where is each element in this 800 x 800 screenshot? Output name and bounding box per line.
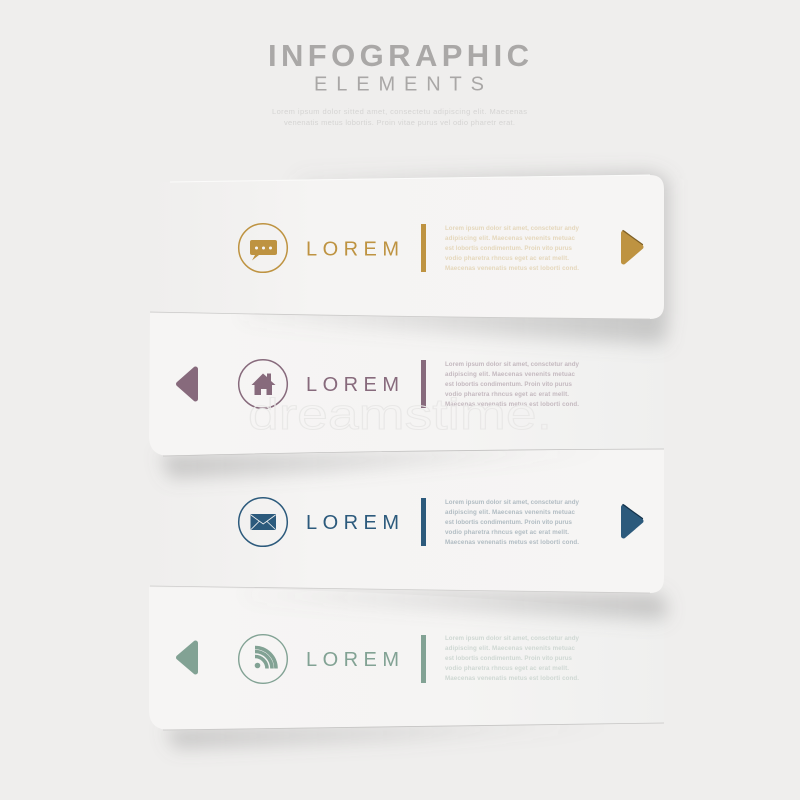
- description: est lobortis condimentum. Proin vito purus: [445, 245, 573, 252]
- label: LOREM: [306, 238, 399, 260]
- intro text: venenatis metus lobortis. Proin vitae purus vel odio pharetr erat.: [284, 118, 515, 127]
- description: Maecenas venenatis metus est loborti cond.: [445, 265, 579, 272]
- arrow edge: [623, 230, 642, 244]
- accent bar: [421, 635, 426, 683]
- arrow left: [178, 643, 196, 672]
- description: [445, 361, 580, 408]
- description: vodio pharetra rhncus eget ac erat mellt.: [445, 665, 569, 672]
- watermark: dreamstime.: [248, 390, 552, 439]
- description: vodio pharetra rhncus eget ac erat mellt.: [445, 529, 569, 536]
- icon: chat circle: [239, 224, 287, 272]
- description: adipiscing elit. Maecenas venenits metuac: [445, 645, 576, 652]
- accent bar: [421, 360, 426, 408]
- title: [268, 38, 529, 127]
- intro text: Lorem ipsum dolor sitted amet, consectetu adipiscing elit. Maecenas: [272, 107, 527, 116]
- intro text: [272, 107, 527, 127]
- label: LOREM: [306, 374, 399, 396]
- panel 2: home: [149, 313, 664, 478]
- arrow left: [178, 369, 196, 399]
- description: adipiscing elit. Maecenas venenits metuac: [445, 371, 576, 378]
- accent bar: [421, 498, 426, 546]
- panel 3: mail: [150, 449, 668, 620]
- description: est lobortis condimentum. Proin vito purus: [445, 519, 573, 526]
- description: Lorem ipsum dolor sit amet, consctetur andy: [445, 635, 580, 642]
- title: INFOGRAPHIC: [268, 38, 529, 73]
- arrow right: [624, 507, 641, 536]
- description: Maecenas venenatis metus est loborti cond.: [445, 539, 579, 546]
- panel 4: rss: [149, 587, 664, 748]
- icon: mail circle: [239, 498, 287, 546]
- icon: rss circle: [239, 635, 287, 683]
- arrow right: [624, 233, 641, 262]
- description: [445, 635, 580, 682]
- accent bar: [421, 224, 426, 272]
- description: Maecenas venenatis metus est loborti cond.: [445, 401, 579, 408]
- description: vodio pharetra rhncus eget ac erat mellt.: [445, 391, 569, 398]
- description: [445, 225, 580, 272]
- icon: home circle: [239, 360, 287, 408]
- label: LOREM: [306, 649, 399, 671]
- description: Lorem ipsum dolor sit amet, consctetur andy: [445, 499, 580, 506]
- description: vodio pharetra rhncus eget ac erat mellt.: [445, 255, 569, 262]
- description: Maecenas venenatis metus est loborti cond.: [445, 675, 579, 682]
- description: Lorem ipsum dolor sit amet, consctetur andy: [445, 225, 580, 232]
- description: adipiscing elit. Maecenas venenits metuac: [445, 235, 576, 242]
- label: LOREM: [306, 512, 399, 534]
- subtitle: ELEMENTS: [314, 74, 484, 96]
- description: est lobortis condimentum. Proin vito purus: [445, 381, 573, 388]
- description: adipiscing elit. Maecenas venenits metuac: [445, 509, 576, 516]
- arrow edge: [623, 504, 642, 518]
- panel 1: chat: [150, 172, 668, 344]
- description: [445, 499, 580, 546]
- description: est lobortis condimentum. Proin vito purus: [445, 655, 573, 662]
- description: Lorem ipsum dolor sit amet, consctetur andy: [445, 361, 580, 368]
